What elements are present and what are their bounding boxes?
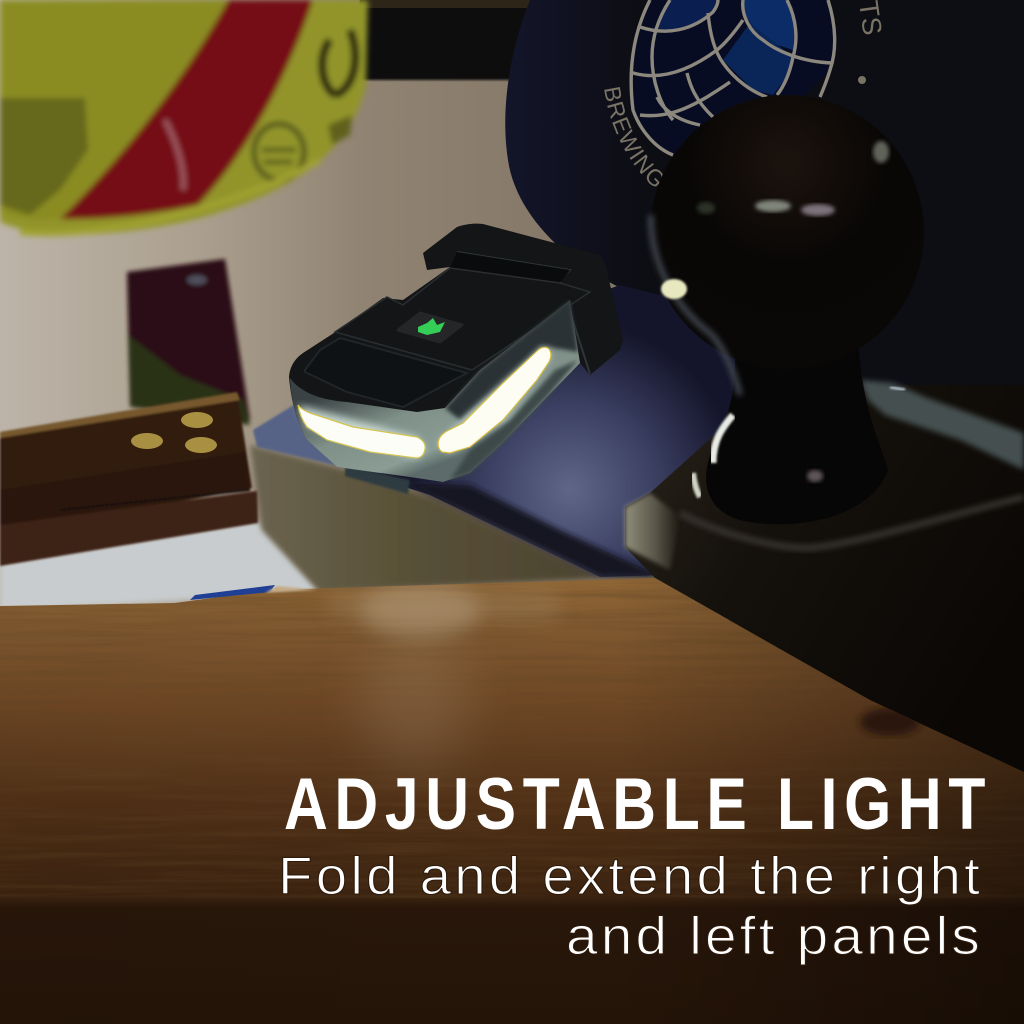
white paper: [0, 520, 320, 612]
tape roll: [0, 0, 368, 234]
cap lettering: BREWING: [604, 87, 663, 186]
block: [0, 392, 258, 566]
right panel shading below LED: [450, 360, 578, 480]
brass dots: [131, 412, 217, 453]
left recess: [305, 338, 467, 407]
lit front face: [290, 300, 580, 482]
knob handle: [650, 95, 924, 524]
caption body: Fold and extend the right: [278, 847, 983, 906]
cap logo globe: [630, 0, 835, 155]
navy cap: [505, 0, 1024, 385]
device silhouette: [289, 224, 623, 482]
ruler blade: [127, 259, 250, 425]
device shadow on table: [250, 445, 600, 592]
knob highlights: [661, 279, 687, 299]
green logo: [418, 318, 445, 335]
right LED bar: [438, 347, 551, 453]
lower lip strap: [345, 465, 410, 494]
power button: [398, 313, 462, 342]
top plate: [335, 268, 590, 370]
caption body: and left panels: [566, 907, 983, 966]
wooden square tool: [0, 259, 258, 566]
plane blade: [860, 380, 1024, 470]
right LED glow: [438, 347, 551, 453]
pencil tip: [190, 585, 275, 600]
caption body: [278, 847, 983, 966]
foreground wood plank: [0, 578, 1024, 1024]
cap dot: [858, 76, 866, 84]
left LED glow: [298, 405, 425, 458]
clip frame detail: [457, 252, 590, 374]
left LED bar: [298, 405, 425, 458]
right panel shading above LED: [445, 300, 578, 420]
headlamp device: [289, 224, 623, 494]
plane body: [625, 380, 1024, 772]
plane front corner: [625, 493, 680, 570]
table background: [0, 0, 1024, 620]
fabric brim: [253, 285, 770, 577]
